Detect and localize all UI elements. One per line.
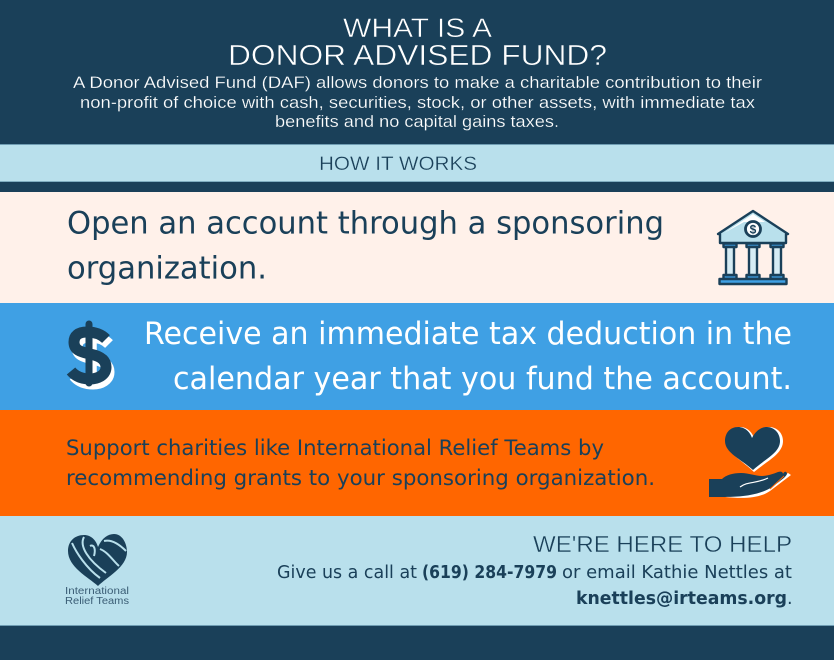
panel: step 2 tax deduction (0, 303, 834, 410)
logo: International Relief Teams (65, 534, 129, 607)
panel: header (0, 0, 834, 145)
intro paragraph (73, 74, 763, 131)
step 2 text: calendar year that you fund the account. (173, 361, 792, 397)
heading: we're here to help: WE'RE HERE TO HELP (533, 531, 792, 557)
panel: step 3 support charities (0, 410, 834, 516)
icon: bank (718, 211, 788, 284)
contact text: . (787, 589, 793, 609)
step 2 text (144, 316, 792, 397)
step 1 text: Open an account through a sponsoring (67, 206, 664, 242)
contact text: (619) 284-7979 (422, 563, 557, 583)
title: WHAT IS A (343, 13, 492, 43)
panel: how it works (0, 144, 834, 182)
step 3 text (66, 436, 655, 490)
icon: hand holding heart (709, 427, 791, 498)
title (228, 13, 607, 72)
step 2 text: Receive an immediate tax deduction in the (144, 316, 792, 352)
panel: footer contact (0, 516, 834, 626)
contact text: Give us a call at (277, 563, 417, 583)
contact text: knettles@irteams.org (576, 589, 787, 609)
title: DONOR ADVISED FUND? (228, 40, 607, 72)
step 3 text: recommending grants to your sponsoring organization. (66, 466, 655, 490)
intro paragraph: benefits and no capital gains taxes. (275, 113, 559, 131)
icon: bank: $ (750, 222, 757, 236)
panel: bottom bar (0, 626, 834, 660)
logo: International Relief Teams: International (65, 586, 129, 597)
contact text (277, 563, 793, 609)
step 1 text: organization. (67, 250, 267, 286)
intro paragraph: A Donor Advised Fund (DAF) allows donors to make a charitable contribution to their (73, 74, 763, 92)
panel: how it works: HOW IT WORKS (319, 154, 477, 175)
logo: International Relief Teams: Relief Teams (65, 596, 129, 607)
contact text: or email Kathie Nettles at (562, 563, 792, 583)
icon: dollar sign (71, 324, 109, 389)
intro paragraph: non-profit of choice with cash, securities, stock, or other assets, with immediate tax (80, 94, 756, 112)
step 3 text: Support charities like International Relief Teams by (66, 436, 604, 460)
step 1 text (67, 206, 664, 286)
panel: step 1 open an account (0, 192, 834, 303)
